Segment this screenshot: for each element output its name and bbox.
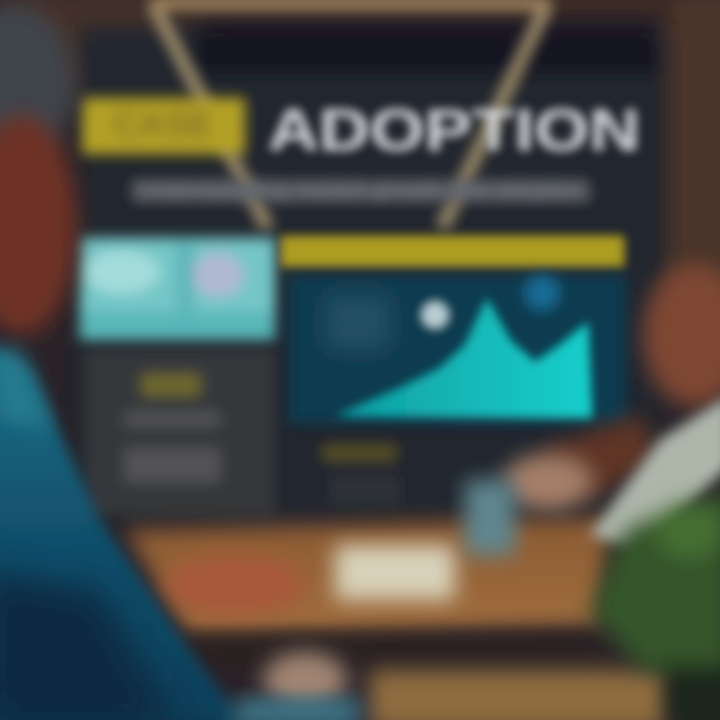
paper on table <box>335 545 455 600</box>
hair <box>0 5 74 165</box>
heading: adoption: ADOPTION <box>268 98 640 163</box>
shirt highlight <box>0 350 50 430</box>
badge text: CASE <box>113 103 213 144</box>
face <box>0 115 77 335</box>
shirt <box>590 395 720 550</box>
table <box>125 518 610 668</box>
yellow chart header bar <box>281 236 624 267</box>
plant <box>590 490 720 720</box>
subtitle text: Understanding market growth and adoption <box>135 177 585 202</box>
left image panel <box>80 238 275 340</box>
cuff <box>235 698 360 720</box>
table shadow <box>180 634 600 668</box>
left lower text panel <box>85 350 275 515</box>
items on table <box>165 555 305 615</box>
heading badge: yellow <box>82 98 245 154</box>
shadow arm <box>540 415 660 500</box>
blue marker <box>524 275 560 311</box>
chart panel <box>288 274 626 424</box>
chart notes <box>325 295 390 350</box>
hand <box>263 652 347 708</box>
person at left <box>0 5 360 720</box>
teal area chart <box>335 298 592 418</box>
hand <box>503 454 593 510</box>
head and hair <box>643 263 720 407</box>
lower screen label <box>322 444 400 505</box>
monitor screen <box>78 26 663 521</box>
white dot <box>421 301 449 329</box>
floor <box>370 670 670 720</box>
glass <box>465 480 515 555</box>
shirt shadow <box>0 570 180 720</box>
overhead lamp triangle <box>152 2 548 228</box>
shirt <box>0 340 250 720</box>
person at right <box>465 263 720 555</box>
